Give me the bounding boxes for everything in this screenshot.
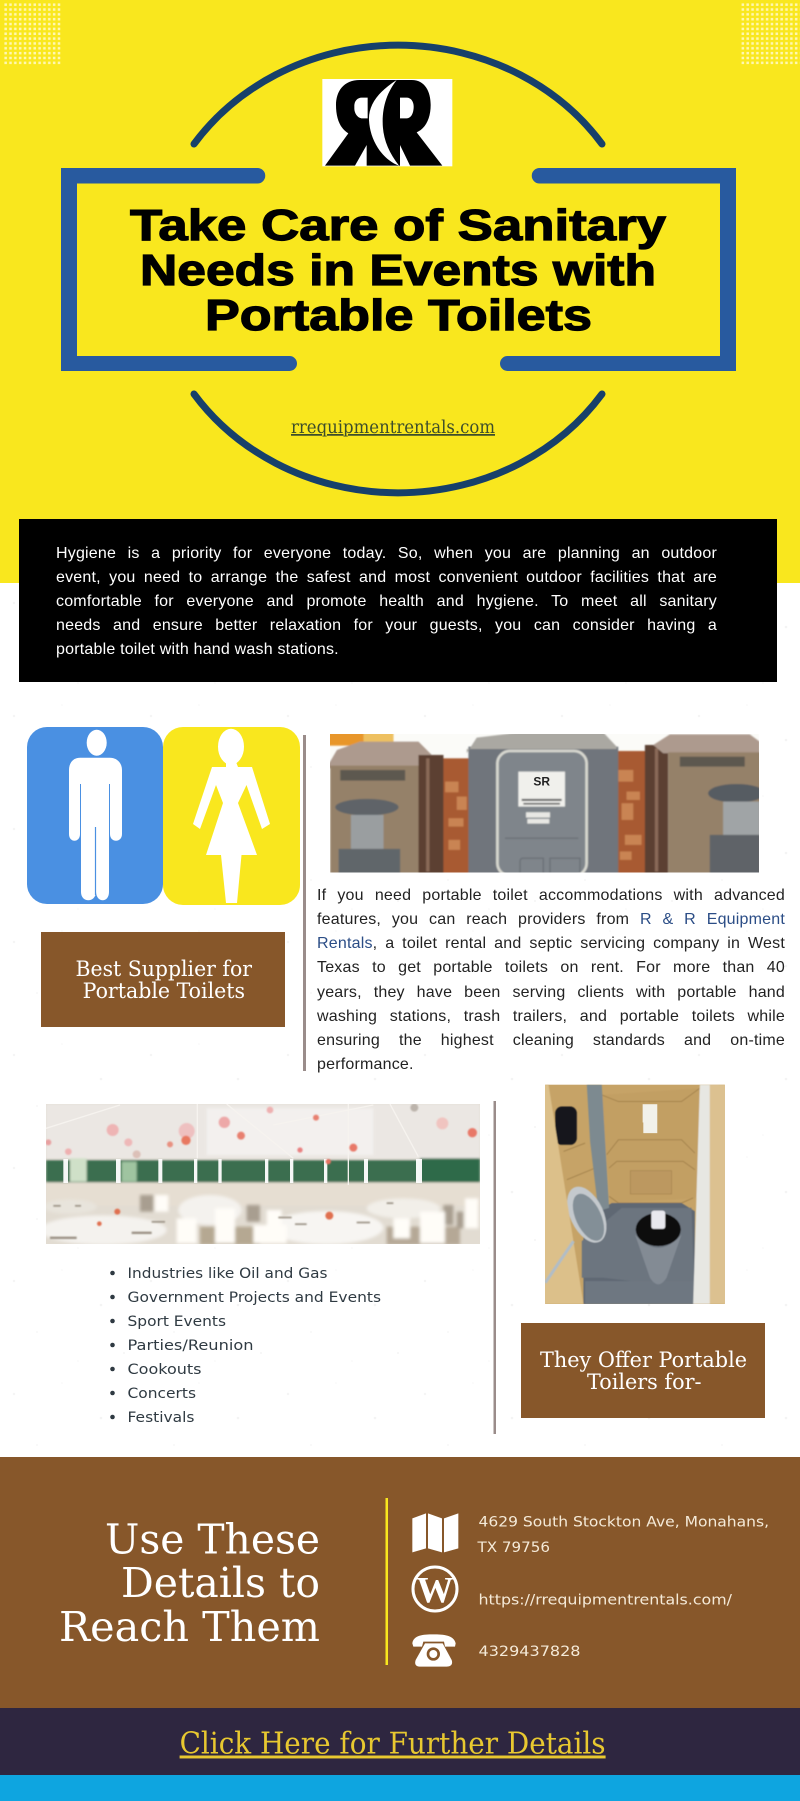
icon: telephone bbox=[412, 1634, 456, 1667]
list: event types: Sport Events bbox=[128, 1314, 226, 1330]
icon: woman bbox=[163, 727, 300, 905]
body paragraph: years, they have been serving clients with portable hand bbox=[317, 984, 785, 1000]
title frame bbox=[61, 168, 736, 371]
intro text bbox=[56, 545, 717, 658]
body paragraph: Texas to get portable toilets on rent. For more than 40 bbox=[317, 959, 785, 976]
body paragraph: Rentals, a toilet rental and septic servicing company in West bbox=[317, 935, 785, 952]
divider bbox=[386, 1498, 388, 1665]
panel: offers label: Toilers for- bbox=[587, 1370, 702, 1395]
intro text: Hygiene is a priority for everyone today. So, when you are planning an outdoor bbox=[56, 545, 717, 562]
body paragraph: features, you can reach providers from R & R Equipment bbox=[317, 911, 785, 928]
intro text: comfortable for everyone and promote health and hygiene. To meet all sanitary bbox=[56, 593, 717, 610]
panel: offers label: They Offer Portable bbox=[540, 1348, 747, 1373]
contact heading: Use These bbox=[105, 1516, 320, 1564]
intro text: portable toilet with hand wash stations. bbox=[56, 640, 339, 658]
icon: man bbox=[27, 727, 163, 904]
panel: supplier label: Portable Toilets bbox=[83, 979, 245, 1004]
intro text: event, you need to arrange the safest and most convenient outdoor facilities that are bbox=[56, 569, 717, 586]
body paragraph: ensuring the highest cleaning standards and on-time bbox=[317, 1032, 785, 1048]
body paragraph bbox=[317, 887, 785, 1072]
circle arcs bbox=[194, 45, 602, 493]
body paragraph: washing stations, trash trailers, and portable toilets while bbox=[317, 1008, 785, 1024]
panel: offers label bbox=[521, 1323, 765, 1418]
panel: intro black box bbox=[19, 519, 777, 682]
panel: yellow header bbox=[0, 0, 800, 583]
address: 4629 South Stockton Ave, Monahans, bbox=[478, 1514, 769, 1530]
icon: map bbox=[412, 1513, 458, 1552]
body paragraph: If you need portable toilet accommodations with advanced bbox=[317, 887, 785, 904]
address bbox=[476, 1514, 769, 1556]
address: TX 79756 bbox=[476, 1540, 550, 1556]
intro text: needs and ensure better relaxation for your guests, you can consider having a bbox=[56, 616, 717, 634]
title: Portable Toilets bbox=[205, 292, 592, 340]
list: event types: Concerts bbox=[128, 1386, 196, 1402]
list: event types: Parties/Reunion bbox=[128, 1338, 254, 1354]
list: event types: Government Projects and Events bbox=[128, 1290, 381, 1306]
icon: wordpress: W bbox=[416, 1570, 454, 1612]
call to action: Click Here for Further Details bbox=[180, 1726, 606, 1760]
panel: supplier label bbox=[41, 932, 285, 1027]
list: event types: Festivals bbox=[128, 1410, 194, 1426]
title: Needs in Events with bbox=[140, 247, 656, 295]
contact heading: Details to bbox=[121, 1559, 320, 1607]
website: https://rrequipmentrentals.com/ bbox=[478, 1592, 732, 1608]
contact heading bbox=[59, 1516, 320, 1651]
panel: supplier label: Best Supplier for bbox=[76, 957, 253, 982]
contact heading: Reach Them bbox=[59, 1603, 320, 1651]
divider bbox=[303, 735, 306, 1071]
body paragraph: performance. bbox=[317, 1056, 414, 1072]
photo: portable toilets row: SR bbox=[533, 775, 550, 789]
photo: toilet interior bbox=[545, 1084, 725, 1304]
title: Take Care of Sanitary bbox=[130, 202, 666, 250]
panel: call to action band bbox=[0, 1708, 800, 1775]
background speckle bbox=[0, 583, 800, 1457]
phone number: 4329437828 bbox=[478, 1644, 580, 1660]
panel: contact band bbox=[0, 1457, 800, 1708]
list: event types: Industries like Oil and Gas bbox=[128, 1266, 328, 1282]
website link: rrequipmentrentals.com bbox=[291, 418, 495, 438]
photo: portable toilets row bbox=[330, 734, 759, 872]
list: event types: Cookouts bbox=[128, 1362, 202, 1378]
divider bbox=[494, 1101, 496, 1434]
title bbox=[130, 202, 666, 340]
list: event types bbox=[110, 1266, 381, 1426]
footer bar bbox=[0, 1775, 800, 1801]
photo: event tent bbox=[46, 1104, 480, 1244]
logo bbox=[322, 79, 452, 166]
